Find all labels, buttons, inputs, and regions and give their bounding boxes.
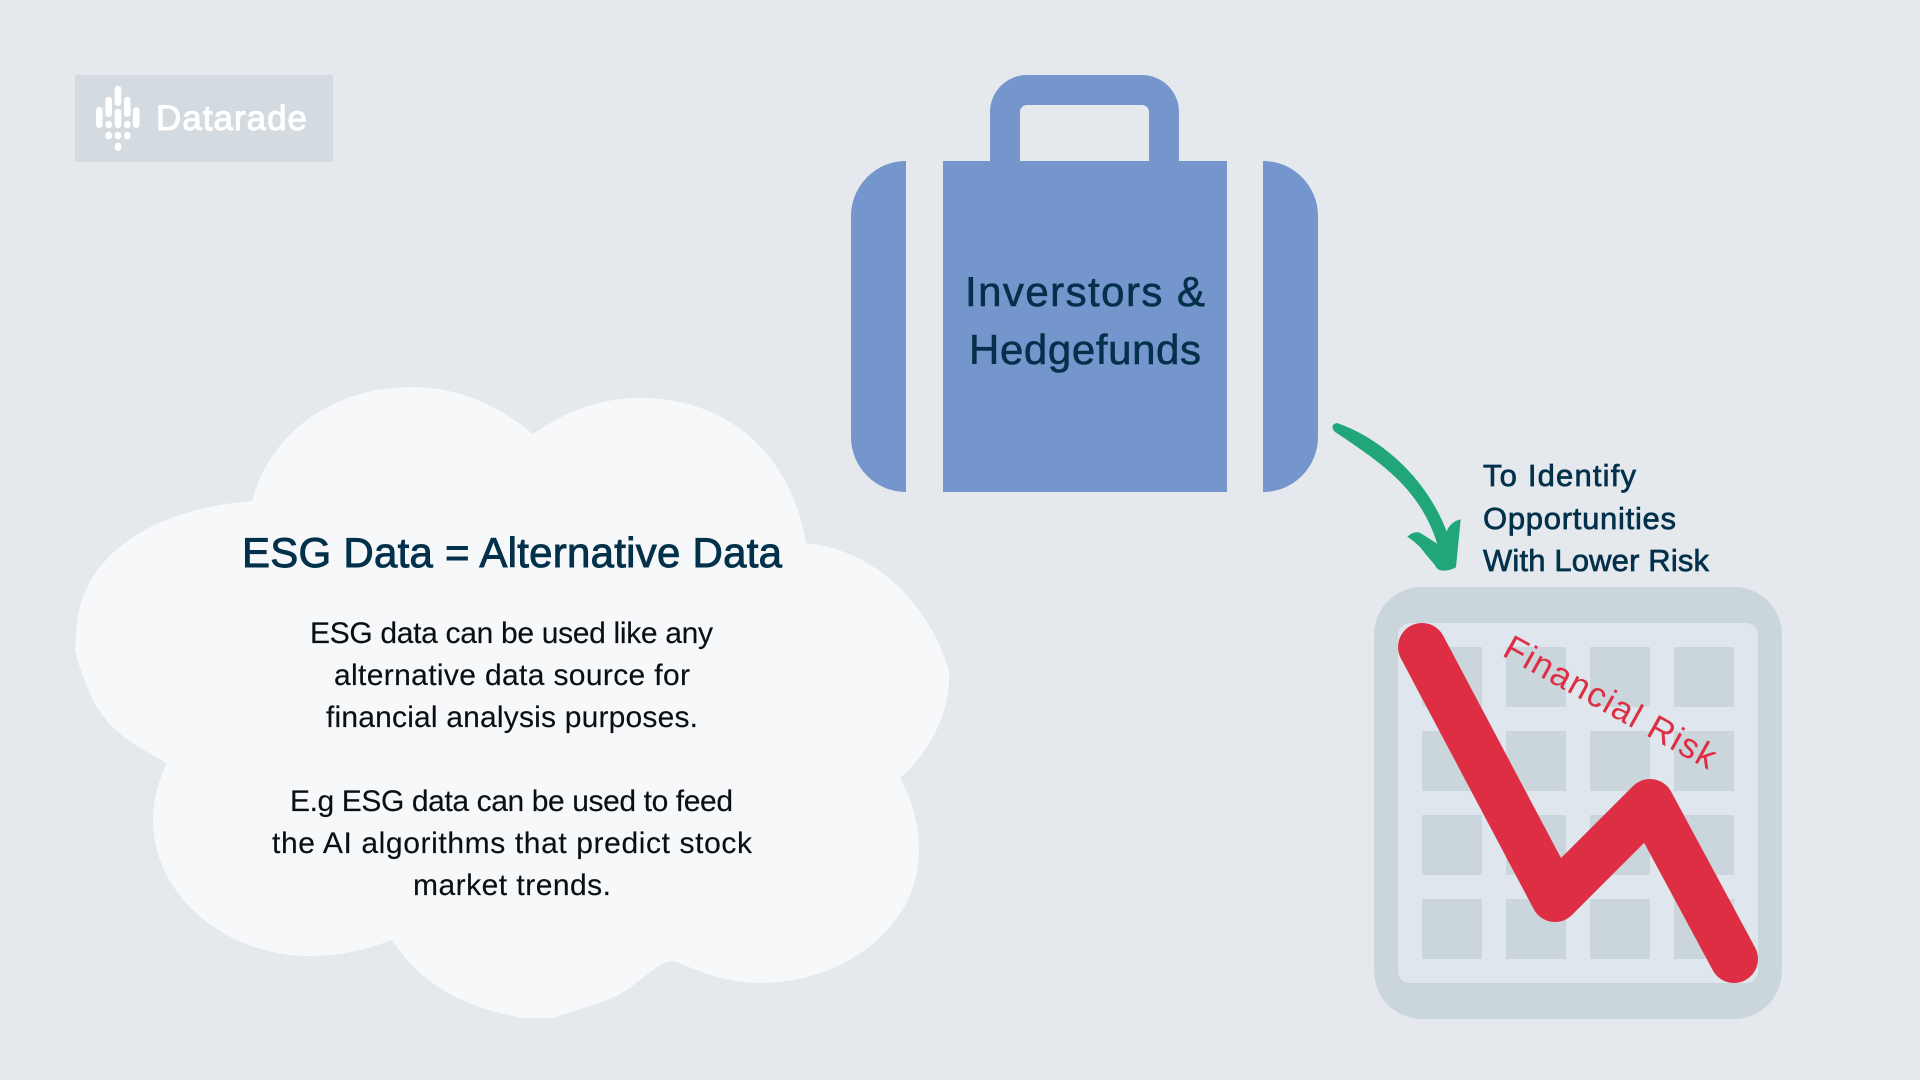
- cloud body text: alternative data source for: [334, 659, 690, 692]
- suitcase label: Hedgefunds: [969, 326, 1201, 373]
- icon: Datarade bars: [96, 86, 140, 151]
- cloud heading: ESG Data = Alternative Data: [242, 529, 783, 576]
- cloud body text: market trends.: [413, 869, 611, 902]
- icon: suitcase with label: [851, 75, 1318, 492]
- text: to identify opportunities: With Lower Risk: [1483, 543, 1710, 578]
- chart frame: [1374, 587, 1782, 1019]
- arrow: green curved arrow to chart: [1332, 423, 1461, 571]
- cloud body text: the AI algorithms that predict stock: [272, 827, 753, 860]
- chart: financial risk calendar: [1374, 587, 1782, 1019]
- chart grid cells: [1422, 647, 1734, 959]
- suitcase label: [965, 268, 1205, 373]
- chart label: financial risk: Financial Risk: [1497, 628, 1724, 777]
- suitcase right panel: [1263, 161, 1318, 492]
- text: to identify opportunities: [1483, 458, 1710, 578]
- cloud body text: [272, 617, 753, 902]
- cloud body text: E.g ESG data can be used to feed: [290, 785, 733, 818]
- logo wordmark: Datarade: [156, 99, 307, 138]
- logo: Datarade: [75, 75, 333, 162]
- cloud shape: [75, 387, 949, 1018]
- chart red falling line: [1422, 647, 1734, 959]
- text: to identify opportunities: Opportunities: [1483, 501, 1676, 536]
- text: to identify opportunities: To Identify: [1483, 458, 1636, 493]
- panel: cloud with ESG explanation: [75, 387, 949, 1018]
- suitcase handle: [990, 75, 1179, 161]
- suitcase label: Inverstors &: [965, 268, 1205, 315]
- suitcase centre panel: [943, 161, 1227, 492]
- chart inner panel: [1398, 623, 1758, 983]
- cloud body text: ESG data can be used like any: [310, 617, 713, 650]
- suitcase left panel: [851, 161, 906, 492]
- cloud body text: financial analysis purposes.: [326, 701, 698, 734]
